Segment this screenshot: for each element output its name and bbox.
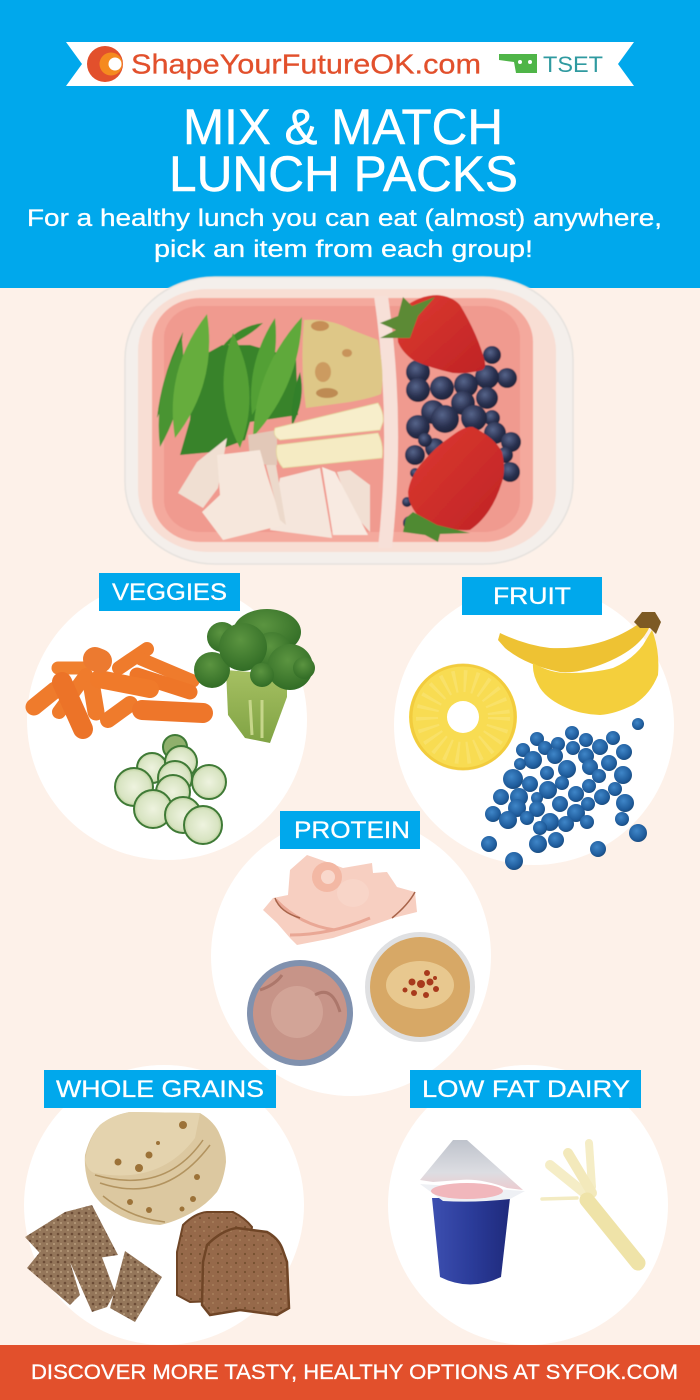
- panel circle: [388, 1065, 668, 1345]
- label: veggies: [99, 573, 240, 611]
- header band: [0, 0, 700, 288]
- blueberries scattered: [481, 718, 647, 870]
- panel circle: [27, 580, 307, 860]
- turkey slices: [178, 430, 370, 540]
- yogurt cup: [420, 1140, 525, 1284]
- blueberries in box: [402, 346, 521, 530]
- label: whole grains: WHOLE GRAINS: [56, 1076, 264, 1103]
- pineapple ring: [409, 664, 517, 770]
- box interior: [152, 298, 533, 542]
- icon: TSET Oklahoma mark: [499, 54, 537, 73]
- subtitle: For a healthy lunch you can eat (almost) anywhere,: [27, 205, 662, 232]
- panel circle: [211, 816, 491, 1096]
- label: protein: PROTEIN: [294, 817, 410, 844]
- subtitle: pick an item from each group!: [154, 236, 533, 263]
- footer band: [0, 1345, 700, 1400]
- panel circle: [24, 1065, 304, 1345]
- tuna can: [247, 960, 353, 1066]
- panel: low fat dairy: [388, 1065, 668, 1345]
- divider: [374, 296, 398, 548]
- bread slices: [177, 1212, 289, 1315]
- title: MIX & MATCH: [183, 99, 503, 155]
- panel: veggies: [27, 573, 315, 860]
- label: veggies: VEGGIES: [112, 579, 227, 606]
- logo text: ShapeYourFutureOK.com: [131, 48, 481, 80]
- icon: Shape Your Future logo: [87, 46, 123, 82]
- panel: fruit: [394, 577, 674, 870]
- title: LUNCH PACKS: [169, 146, 518, 202]
- carrots: [34, 649, 203, 729]
- label: whole grains: [44, 1070, 276, 1108]
- box lid edge: [125, 277, 573, 564]
- footer band: DISCOVER MORE TASTY, HEALTHY OPTIONS AT SYFOK.COM: [31, 1361, 678, 1384]
- string cheese: [542, 1143, 638, 1263]
- tortillas: [85, 1112, 226, 1225]
- hummus: [302, 320, 382, 408]
- hummus cup: [365, 932, 475, 1042]
- broccoli: [194, 609, 315, 743]
- label: low fat dairy: LOW FAT DAIRY: [422, 1076, 630, 1103]
- string cheese: [274, 403, 383, 468]
- label: fruit: [462, 577, 602, 615]
- panel: whole grains: [24, 1065, 304, 1345]
- title: [169, 99, 518, 202]
- panel: protein: [211, 811, 491, 1096]
- strawberries: [380, 295, 504, 542]
- lunch box photo: [125, 277, 573, 564]
- subtitle: [27, 205, 662, 263]
- panel circle: [394, 585, 674, 865]
- TSET text: TSET: [543, 52, 603, 77]
- label: low fat dairy: [410, 1070, 641, 1108]
- cucumber slices: [115, 735, 226, 844]
- crackers: [25, 1205, 162, 1322]
- banner: logos: [66, 42, 634, 86]
- label: protein: [280, 811, 420, 849]
- label: fruit: FRUIT: [493, 583, 571, 610]
- snap peas: [157, 314, 302, 455]
- bananas: [498, 612, 661, 715]
- sliced ham: [263, 855, 417, 945]
